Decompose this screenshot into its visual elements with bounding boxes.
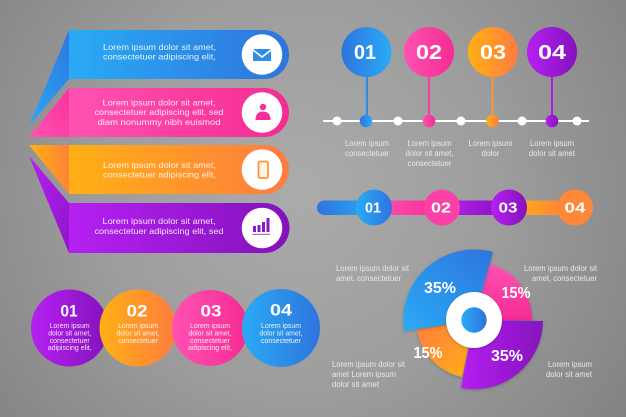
caption: bottom right: Lorem ipsum — [548, 360, 592, 369]
step 02: 02 — [416, 42, 442, 64]
slice: blue 35% — [403, 249, 493, 331]
percentage labels: 15% — [502, 285, 531, 302]
caption: top left: Lorem ipsum dolor sit — [336, 264, 410, 273]
pill segments — [317, 200, 575, 215]
percentage labels: 35% — [424, 280, 456, 297]
slice: orange 15% — [417, 320, 474, 377]
pill node 03 — [491, 190, 527, 226]
step 01: 01 — [354, 42, 376, 64]
circle 02: dolor sit amet, — [116, 328, 160, 338]
percentage labels — [414, 280, 531, 365]
step 01: consectetuer — [345, 149, 389, 158]
banner: pink person: consectetuer adipiscing elit, sed — [94, 108, 224, 117]
pill node 01 — [356, 190, 392, 226]
step 04: dolor sit amet — [529, 149, 576, 158]
caption: bottom right: dolor sit amet — [546, 370, 593, 379]
step 02: consectetuer — [408, 159, 452, 168]
circle 02 — [100, 290, 176, 366]
icon: phone — [258, 162, 268, 178]
percentage labels: 35% — [491, 348, 523, 365]
banner: orange phone: consectetuer adipiscing elit, — [103, 170, 216, 180]
caption: top right: amet, consectetuer — [532, 274, 597, 283]
caption: top left — [336, 264, 410, 283]
icon: person — [256, 104, 270, 120]
circle 04 — [242, 289, 320, 367]
caption: top right — [524, 264, 598, 283]
circle 04: consectetuer — [261, 336, 301, 345]
step 03: dolor — [482, 149, 500, 158]
circle 04: 04 — [270, 302, 293, 320]
banner: pink person: Lorem ipsum dolor sit amet, — [102, 98, 216, 108]
banner: orange phone: Lorem ipsum dolor sit amet, — [103, 161, 216, 170]
slice: purple 35% — [461, 320, 543, 389]
circle 02: 02 — [126, 302, 148, 320]
panel: ribbon banners — [29, 30, 290, 253]
circle 04: Lorem ipsum — [261, 321, 301, 330]
circle 03: 03 — [200, 302, 222, 320]
panel: overlapping circles — [31, 289, 320, 367]
circle 01: consectetuer — [50, 336, 90, 345]
circle 03: Lorem ipsum — [190, 321, 230, 330]
pie hub — [446, 292, 502, 348]
step 04: 04 — [538, 42, 567, 64]
caption: bottom left: dolor sit amet — [332, 380, 380, 389]
banner: purple chart: Lorem ipsum dolor sit amet, — [102, 217, 216, 226]
caption: bottom right — [546, 360, 593, 379]
caption: top right: Lorem ipsum dolor sit — [524, 264, 598, 273]
percentage labels: 15% — [414, 345, 443, 362]
icon: envelope — [253, 49, 271, 61]
step 03 — [468, 27, 518, 158]
step 04 — [527, 27, 577, 158]
step 03: 03 — [480, 42, 506, 64]
banner: blue mail: consectetuer adipiscing elit, — [103, 52, 216, 62]
caption: top left: amet, consectetuer — [336, 274, 401, 283]
caption: bottom left: Lorem ipsum dolor sit — [332, 360, 406, 369]
circle 01: adipiscing elit, — [48, 343, 92, 352]
banner: pink person — [29, 88, 289, 137]
circle 01: Lorem ipsum — [50, 321, 90, 330]
circle 03: consectetuer — [190, 336, 230, 345]
circle 03: dolor sit amet, — [188, 328, 232, 338]
banner: blue mail: Lorem ipsum dolor sit amet, — [103, 43, 216, 52]
panel: pie chart — [332, 249, 598, 389]
panel: numbered timeline — [323, 27, 589, 168]
step 01 — [342, 27, 392, 158]
timeline axis — [323, 116, 589, 126]
step 03: Lorem ipsum — [468, 139, 512, 148]
step 02 — [404, 27, 454, 168]
pill node 02: 02 — [431, 200, 451, 216]
step 01: Lorem ipsum — [345, 139, 389, 148]
icon: bar chart — [252, 218, 270, 235]
pill node 04: 04 — [564, 200, 586, 216]
circle 02: consectetuer — [118, 336, 158, 345]
banner: purple chart — [29, 156, 290, 253]
step 02: Lorem ipsum — [408, 139, 452, 148]
circle 02: Lorem ipsum — [118, 321, 158, 330]
circle 03: adipiscing elit, — [188, 343, 232, 352]
pill node 01: 01 — [365, 200, 381, 216]
banner: purple chart: consectetuer adipiscing elit, sed — [94, 227, 224, 236]
pill node 03: 03 — [498, 200, 518, 216]
step 02: dolor sit amet, — [406, 149, 454, 158]
slice: pink 15% — [474, 264, 532, 320]
panel: horizontal pill steps — [317, 190, 593, 226]
banner: pink person: diam nonummy nibh euismod — [98, 118, 221, 127]
circle 01: 01 — [60, 302, 78, 320]
caption: bottom left — [332, 360, 406, 389]
pill node 04 — [557, 190, 593, 226]
banner: orange phone — [29, 145, 289, 194]
step 04: Lorem ipsum — [530, 139, 574, 148]
pill node 02 — [424, 190, 460, 226]
circle 01: dolor sit amet, — [48, 328, 91, 338]
circle 01 — [31, 290, 108, 366]
circle 03 — [172, 290, 248, 366]
banner: blue mail — [29, 30, 289, 126]
circle 04: dolor sit amet, — [260, 328, 302, 338]
caption: bottom left: amet Lorem ipsum — [332, 370, 396, 379]
